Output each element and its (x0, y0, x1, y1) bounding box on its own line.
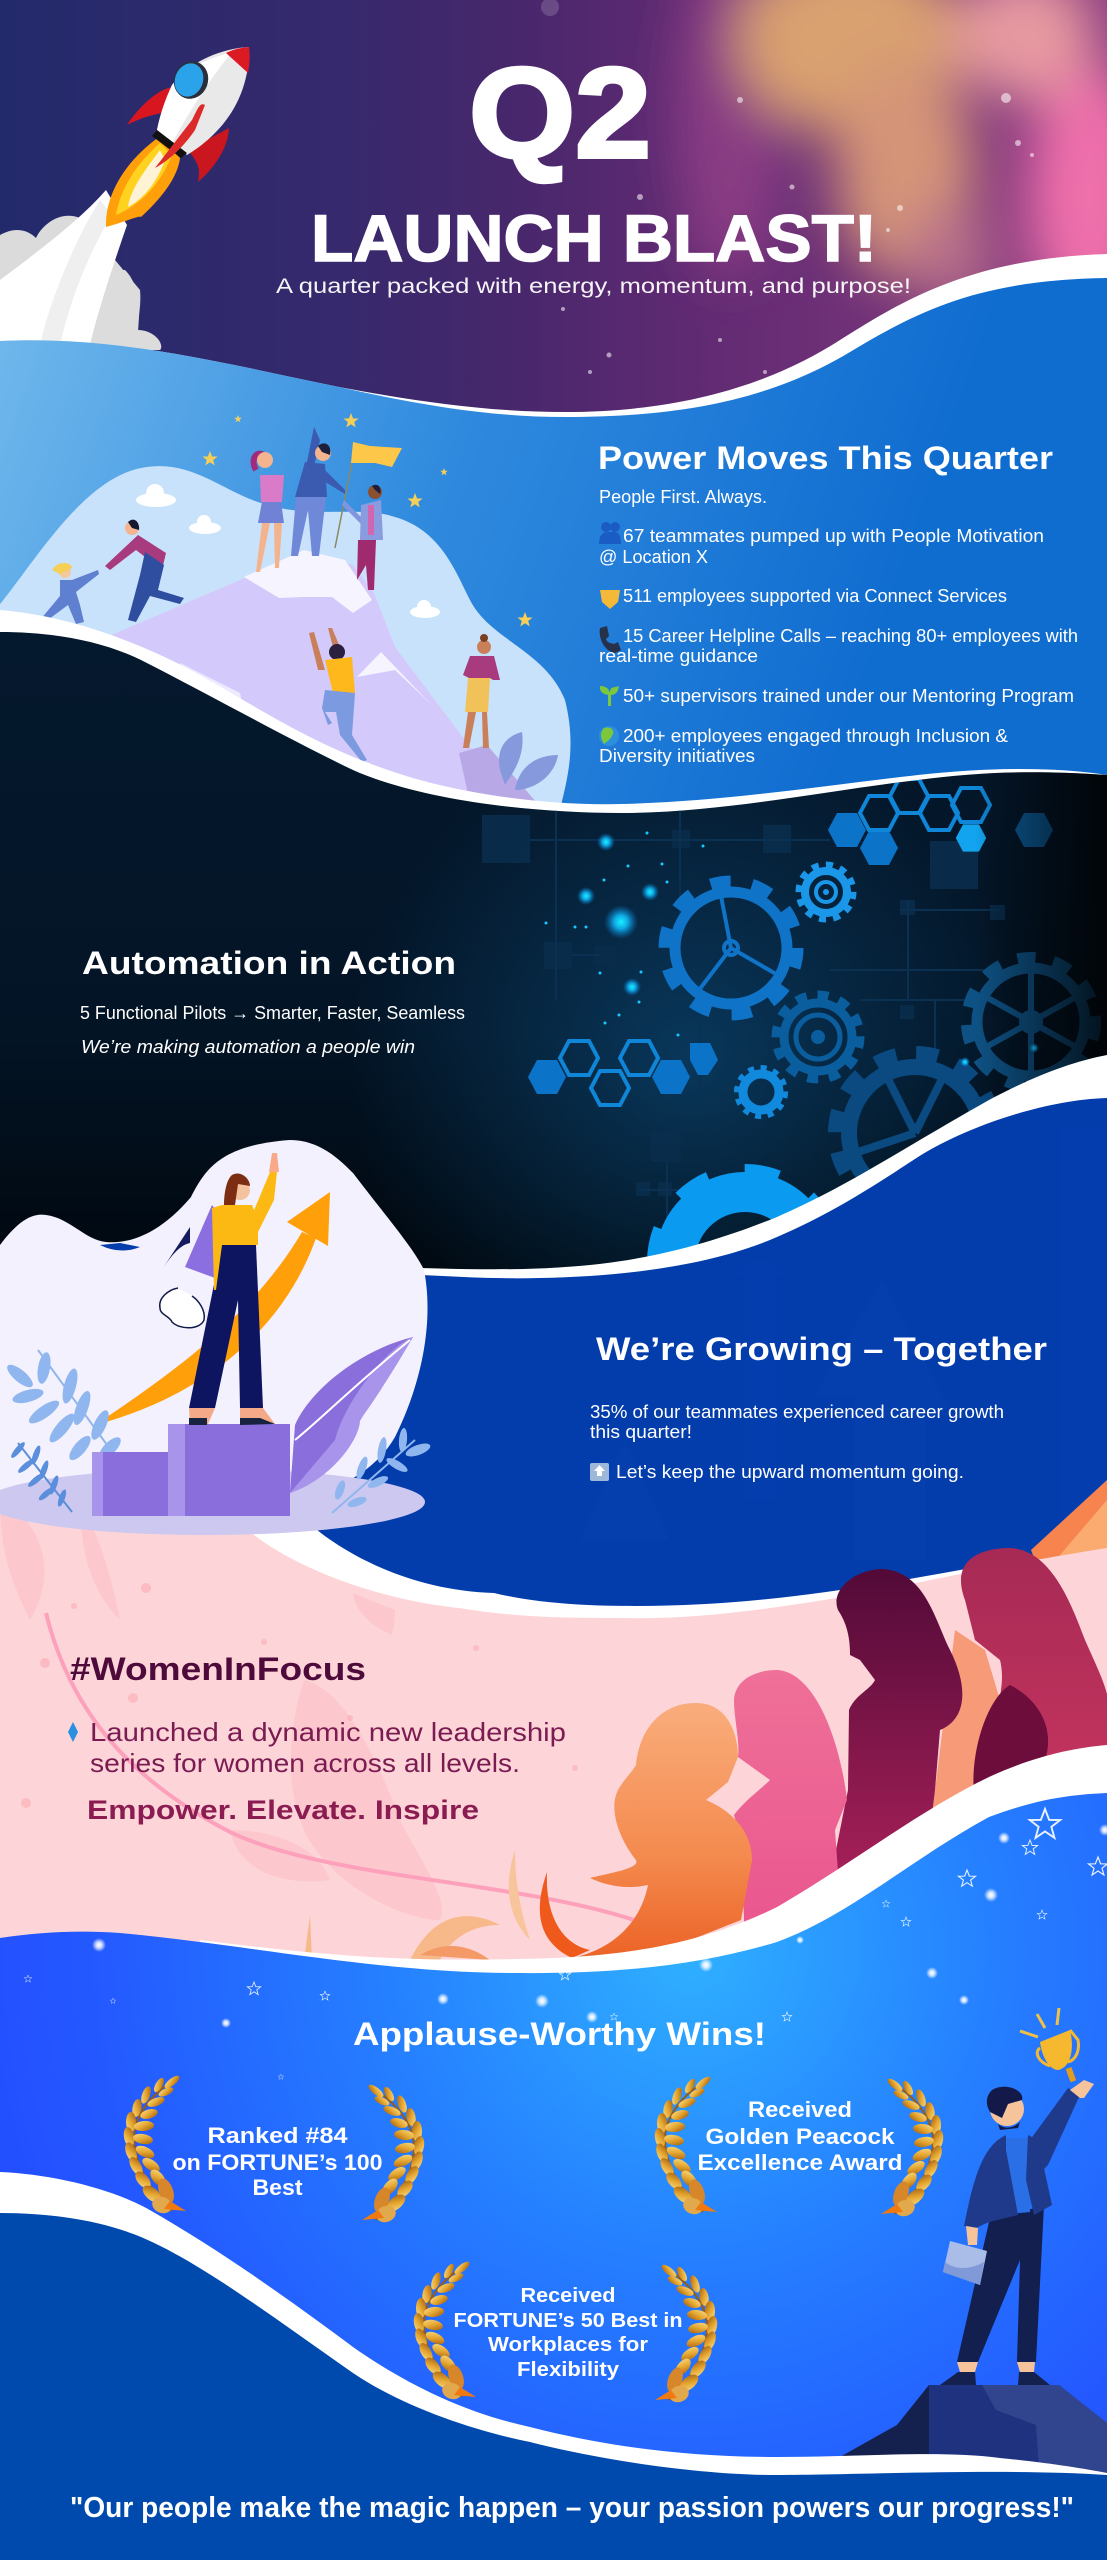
text: excellence award: Excellence Award (698, 2150, 902, 2175)
gear: small bright (799, 865, 853, 919)
icon: people (599, 522, 621, 544)
panel: automation text (80, 945, 465, 1057)
text: on fortune: on FORTUNE’s 100 (172, 2150, 382, 2175)
text: closing quote: "Our people make the magic happen – your passion powers our progress!" (70, 2492, 1074, 2524)
icon: laurel right (881, 2077, 945, 2219)
award: FORTUNE 50 Best (412, 2260, 719, 2405)
icon: top arrow (590, 1463, 609, 1481)
plant: right (332, 1428, 432, 1513)
icon: laurel right (655, 2263, 719, 2405)
text: career helpline: 15 Career Helpline Calls – reaching 80+ employees with (623, 626, 1078, 646)
text: inclusion: 200+ employees engaged through Inclusion & (623, 726, 1008, 746)
text: this quarter: this quarter! (590, 1422, 692, 1442)
text: connect services: 511 employees supported via Connect Services (623, 586, 1007, 606)
plant: left low (9, 1440, 72, 1512)
text: workplaces: Workplaces for (488, 2334, 648, 2356)
plant: left tall (4, 1350, 124, 1463)
illustration: woman on podium with rising arrow (0, 1140, 432, 1535)
icon: seedling (600, 686, 619, 706)
text: tagline: Empower. Elevate. Inspire (87, 1795, 479, 1825)
heading: We're Growing - Together: We’re Growing – Together (596, 1331, 1047, 1367)
heading: Automation in Action: Automation in Action (82, 945, 456, 981)
panel: closing banner background (0, 2172, 1107, 2560)
gear: small lower (737, 1068, 785, 1116)
panel: women in focus background (0, 1470, 1107, 2000)
icon: globe (599, 726, 619, 746)
icon: handshake (600, 590, 620, 609)
heading: Q2: Q2 (469, 42, 651, 185)
icon: phone (600, 626, 621, 653)
panel: growing text (590, 1331, 1047, 1482)
text: received: Received (520, 2285, 616, 2307)
gear: lower bright (647, 1164, 818, 1256)
award: Golden Peacock (653, 2075, 945, 2219)
text: location: @ Location X (599, 547, 708, 567)
panel: power moves background (0, 254, 1107, 860)
text: ranked: Ranked #84 (208, 2123, 348, 2148)
text: people win: We’re making automation a people win (81, 1037, 415, 1057)
text: diversity: Diversity initiatives (599, 746, 755, 766)
icon: laurel right (362, 2083, 426, 2225)
illustration: gears and circuitry (398, 772, 1107, 1269)
gear: lower dim (828, 1046, 994, 1178)
text: people first: People First. Always. (599, 487, 767, 507)
heading: LAUNCH BLAST: LAUNCH BLAST! (311, 201, 877, 275)
text: career growth: 35% of our teammates experienced career growth (590, 1402, 1004, 1422)
panel: growing background with band (0, 1055, 1107, 1640)
illustration: team climbing a mountain (0, 413, 571, 805)
text: subtitle: A quarter packed with energy, momentum, and purpose! (276, 275, 911, 298)
text: launched: Launched a dynamic new leadership (90, 1717, 566, 1747)
heading: Applause-Worthy Wins: Applause-Worthy Wins! (353, 2016, 766, 2052)
panel: power moves content (598, 440, 1078, 766)
illustration: man holding trophy on rock (823, 2008, 1107, 2490)
panel: wins background (0, 1745, 1107, 2560)
illustration: rocket with smoke (0, 47, 250, 350)
text: people motivation: 67 teammates pumped up with People Motivation (623, 526, 1044, 546)
text: pilots: 5 Functional Pilots → Smarter, Faster, Seamless (80, 1003, 465, 1023)
heading: Power Moves This Quarter: Power Moves This Quarter (598, 440, 1053, 476)
icon: trophy (1037, 2030, 1079, 2082)
text: upward momentum: Let’s keep the upward momentum going. (616, 1462, 964, 1482)
gear: medium (776, 995, 860, 1079)
panel: header background (0, 0, 1107, 440)
award: FORTUNE 100 Best (122, 2074, 426, 2225)
icon: laurel left (412, 2260, 476, 2402)
text: flexibility: Flexibility (517, 2359, 620, 2381)
text: series: series for women across all levels. (90, 1748, 520, 1778)
heading: WomenInFocus: #WomenInFocus (70, 1651, 366, 1687)
icon: laurel left (653, 2075, 717, 2217)
panel: automation background with band (0, 610, 1107, 1300)
text: received: Received (748, 2097, 852, 2122)
gear: right dim (967, 958, 1095, 1086)
text: golden peacock: Golden Peacock (706, 2124, 895, 2149)
icon: bullet diamond (68, 1722, 78, 1742)
icon: laurel left (122, 2074, 186, 2216)
text: best: Best (252, 2175, 303, 2200)
text: fortune 50: FORTUNE’s 50 Best in (454, 2310, 682, 2332)
text: mentoring: 50+ supervisors trained under our Mentoring Program (623, 686, 1074, 706)
illustration: silhouettes of women (304, 1548, 1107, 1960)
text: guidance: real-time guidance (599, 646, 758, 666)
panel: women in focus text (68, 1651, 566, 1825)
gear: large bright (665, 882, 797, 1014)
